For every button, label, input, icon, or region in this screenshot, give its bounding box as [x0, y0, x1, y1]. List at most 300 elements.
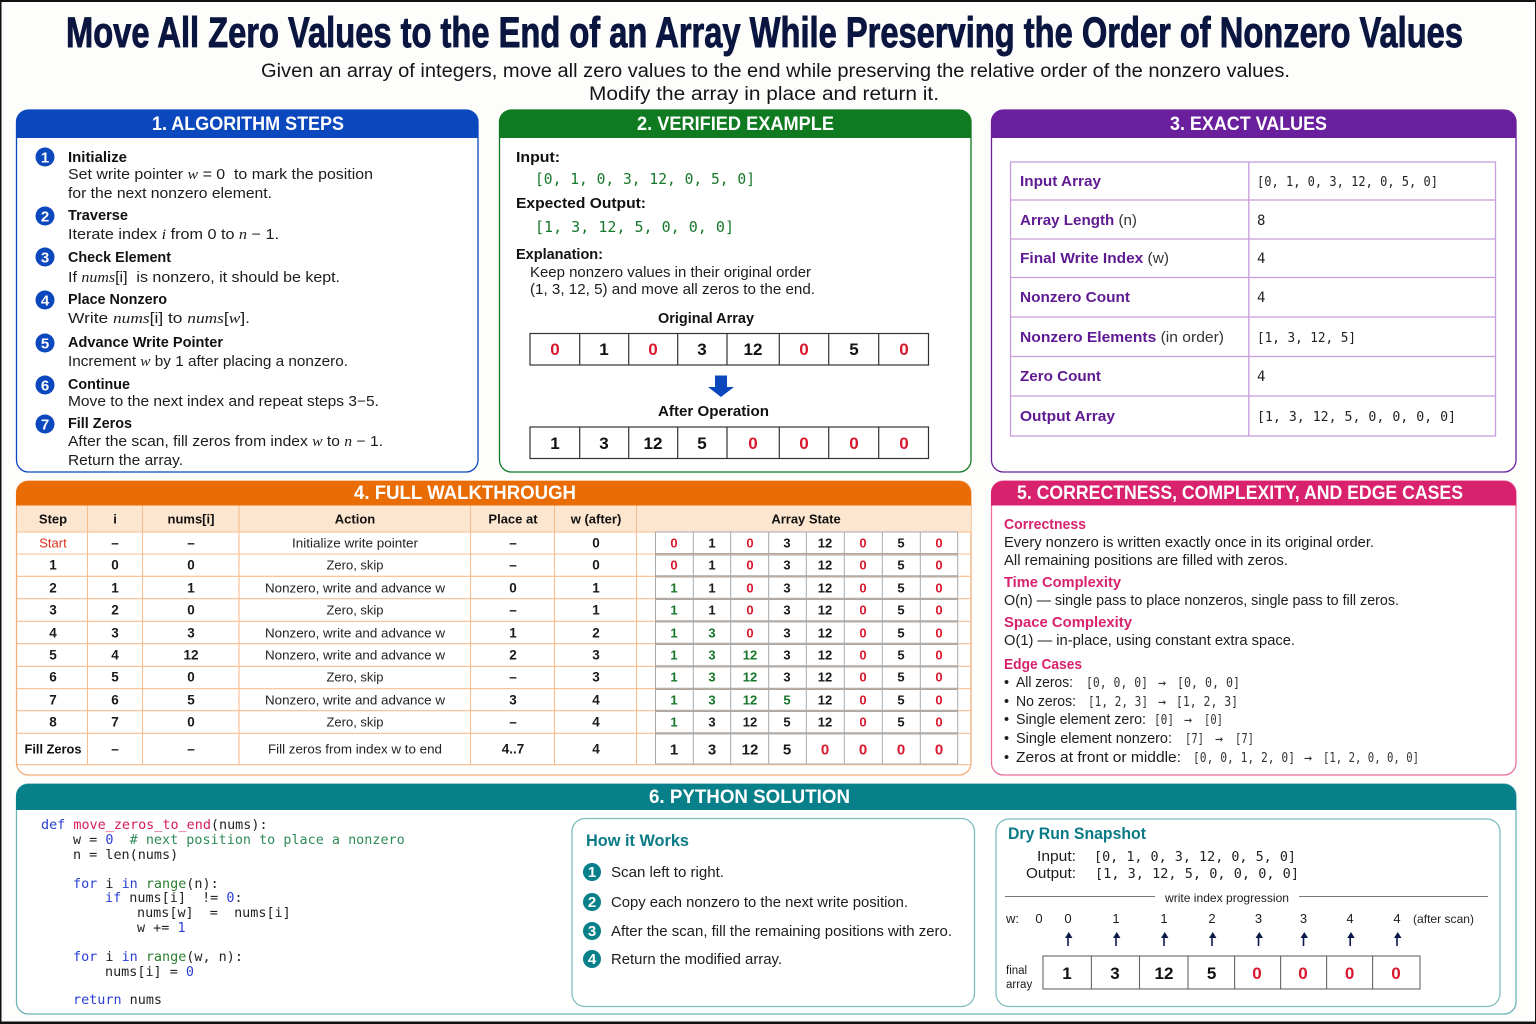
edge cases: → [1215, 731, 1223, 747]
row: fill zeros: 0 [821, 742, 829, 758]
row: step 1: 0 [592, 558, 600, 572]
row: step 8: 12 [743, 714, 757, 730]
correctness: Every nonzero is written exactly once in its original order. [1004, 535, 1374, 551]
original array: 3 [697, 340, 707, 359]
row: step 7: 5 [187, 692, 195, 708]
row: step 8: 1 [670, 714, 678, 730]
row: step 7: 5 [783, 692, 791, 708]
after operation array: 12 [644, 434, 662, 453]
row: step 8: 12 [818, 714, 832, 730]
row: fill zeros: – [187, 742, 195, 756]
dry run input output [1026, 849, 1299, 882]
header row: Place at [488, 512, 538, 526]
row: step 7: 3 [708, 692, 716, 708]
final array: array [1006, 979, 1032, 991]
how step 1: 1 [588, 864, 596, 881]
input: [0, 1, 0, 3, 12, 0, 5, 0] [535, 170, 755, 188]
row: step 5: 5 [897, 648, 905, 662]
write index row: 2 [1208, 911, 1216, 926]
header row: Array State [771, 512, 841, 526]
row: step 6: 0 [935, 670, 943, 684]
row: step 5: 5 [49, 648, 57, 662]
input [516, 150, 755, 188]
row: step 3: 0 [746, 602, 754, 618]
row: start: Initialize write pointer [292, 536, 419, 550]
correctness [1004, 516, 1374, 569]
step 5: 5 [41, 336, 49, 352]
step 7 [36, 414, 383, 469]
row: step 3: 1 [708, 602, 716, 618]
row: step 2: 0 [859, 580, 867, 596]
step 6: Continue [68, 377, 130, 393]
row: start: 3 [783, 536, 791, 550]
card: dry run snapshot: Dry Run Snapshot [1008, 825, 1146, 843]
arrow: down [708, 376, 734, 397]
edge cases: Edge Cases [1004, 656, 1082, 673]
row: fill zeros: Fill Zeros [24, 742, 82, 756]
row: fill zeros: 0 [859, 742, 867, 758]
expected output: [1, 3, 12, 5, 0, 0, 0] [535, 218, 734, 236]
write index row: 4 [1346, 911, 1354, 926]
step 3 [36, 248, 340, 286]
progress arrows [1065, 932, 1402, 946]
row: start: – [111, 536, 119, 550]
step 6: 6 [41, 378, 49, 394]
row: step 7: 4 [592, 692, 600, 708]
row: step 7: 5 [897, 692, 905, 708]
row: step 8: 3 [708, 714, 716, 730]
table: exact values: [1, 3, 12, 5] [1257, 330, 1356, 346]
step 7: 7 [41, 416, 49, 434]
row: step 8: 0 [935, 714, 943, 730]
row: step 4: 3 [187, 626, 195, 640]
row: step 5: 1 [670, 648, 678, 662]
table: exact values: Output Array [1020, 408, 1116, 425]
code block: w += 1 [137, 921, 186, 936]
dry run input output: Input: [1037, 849, 1076, 865]
how step 3: After the scan, fill the remaining positions with zero. [611, 924, 952, 940]
edge cases: [0, 0, 0] [1086, 675, 1148, 691]
edge cases: [7] [1235, 731, 1254, 747]
after operation array [530, 404, 928, 458]
final array: 0 [1252, 964, 1262, 983]
final array: 12 [1155, 964, 1173, 983]
header row: i [113, 512, 117, 526]
row: step 1: 12 [818, 558, 832, 572]
edge cases: All zeros: [1016, 675, 1073, 691]
row: step 4: 0 [935, 626, 943, 640]
edge cases: [1, 2, 0, 0, 0] [1323, 750, 1419, 766]
row: fill zeros: 3 [708, 742, 716, 758]
row: fill zeros: 0 [935, 742, 943, 758]
row: step 4 [49, 626, 943, 640]
edge cases: • [1004, 694, 1009, 710]
row: step 5 [49, 648, 943, 662]
step 4: Write nums [i] to nums [w]. [68, 311, 250, 327]
panel: python solution [16, 784, 1516, 1014]
step 5: Increment w by 1 after placing a nonzero. [68, 354, 348, 370]
step 4: Place Nonzero [68, 292, 167, 308]
panel: exact values [991, 110, 1516, 472]
row: step 7: 0 [935, 692, 943, 708]
edge cases: Single element zero: [1016, 712, 1146, 728]
row: step 5: 12 [183, 648, 199, 662]
row: step 1: 0 [746, 558, 754, 572]
row: step 6: 3 [783, 670, 791, 684]
how step 4: Return the modified array. [611, 952, 782, 968]
header row: nums[i] [168, 512, 214, 526]
code block: if nums[i] != 0: [105, 891, 243, 906]
after operation array: 0 [849, 434, 859, 453]
row: step 8: 7 [111, 714, 119, 730]
row: step 5: 2 [509, 648, 517, 662]
table: exact values: 8 [1257, 213, 1265, 229]
final array: 0 [1345, 964, 1354, 983]
header row: w (after) [570, 512, 621, 526]
write index row: 1 [1112, 911, 1120, 926]
header row [39, 512, 841, 526]
row: step 4: 4 [49, 626, 57, 640]
original array: 0 [899, 340, 909, 359]
final array: final [1006, 965, 1027, 977]
row: step 7: 0 [859, 692, 867, 708]
how step 1 [583, 863, 724, 881]
row: step 2: 1 [592, 580, 600, 596]
row: step 4: 1 [670, 626, 678, 640]
card: dry run snapshot [996, 819, 1500, 1006]
final array: 0 [1298, 964, 1308, 983]
row: step 2: 1 [187, 580, 195, 596]
row: start: 12 [818, 536, 832, 550]
row: step 3: 3 [783, 602, 791, 618]
expected output [516, 196, 734, 236]
subtitle: Given an array of integers, move all zero values to the end while preserving the relative order of the nonzero values. [261, 61, 1290, 82]
row: step 3: 0 [187, 602, 195, 618]
row: fill zeros: 1 [670, 742, 678, 758]
edge cases: • [1004, 712, 1009, 728]
row: step 7: 6 [111, 692, 119, 708]
step 3: 3 [41, 250, 49, 266]
edge cases: [1, 2, 3] [1176, 694, 1238, 710]
table: exact values: Input Array [1020, 173, 1102, 190]
row: step 1: Zero, skip [326, 558, 384, 572]
row: start: – [187, 536, 195, 550]
write index row: 3 [1255, 911, 1262, 926]
edge cases: [0] [1154, 712, 1174, 728]
explanation [516, 247, 815, 298]
dry run input output: [1, 3, 12, 5, 0, 0, 0, 0] [1095, 866, 1299, 882]
row: step 2: 0 [935, 580, 943, 596]
write index row: w: [1005, 911, 1019, 926]
row: step 4: 3 [783, 626, 791, 640]
row: step 2: Nonzero, write and advance w [265, 580, 446, 596]
how step 3: 3 [588, 923, 596, 940]
final array [1006, 956, 1420, 991]
header row: Step [39, 512, 67, 526]
explanation: Keep nonzero values in their original order [530, 265, 811, 281]
table: exact values: Final Write Index (w) [1020, 250, 1169, 267]
final array: 3 [1110, 964, 1120, 983]
row: step 6: – [509, 670, 517, 684]
row: step 6: Zero, skip [326, 670, 384, 684]
row: step 7: 3 [509, 692, 517, 708]
subtitle: Modify the array in place and return it. [589, 84, 939, 105]
code block: nums[w] = nums[i] [137, 906, 291, 921]
step 2 [36, 206, 279, 243]
heading: correctness: 5. CORRECTNESS, COMPLEXITY, AND EDGE CASES [1017, 483, 1463, 504]
card: how it works [572, 818, 974, 1006]
row: step 2: 12 [818, 580, 832, 596]
row: fill zeros: 12 [742, 742, 758, 758]
edge cases: → [1184, 712, 1192, 728]
row: step 8: 8 [49, 714, 57, 730]
step 4 [36, 290, 250, 327]
row: step 8: 4 [592, 714, 600, 730]
original array: Original Array [658, 311, 754, 327]
correctness: All remaining positions are filled with zeros. [1004, 553, 1288, 569]
row: step 1: – [509, 558, 517, 572]
step 1: Initialize [68, 150, 127, 166]
edge cases: → [1158, 694, 1166, 710]
write index label: write index progression [1164, 891, 1289, 905]
panel: algorithm steps [16, 110, 478, 472]
row: step 4: 3 [111, 626, 119, 640]
space complexity: Space Complexity [1004, 614, 1133, 631]
row: step 1: 5 [897, 558, 905, 572]
row: step 1: 0 [187, 558, 195, 572]
write index row: (after scan) [1413, 912, 1474, 926]
row: step 5: 0 [859, 648, 867, 662]
row: step 2: 3 [783, 580, 791, 596]
table: exact values: Nonzero Elements (in order) [1020, 329, 1224, 346]
code block: def move_zeros_to_end(nums): [41, 818, 268, 833]
heading: python solution: 6. PYTHON SOLUTION [649, 787, 850, 808]
edge cases: [7] [1185, 731, 1204, 747]
row: step 7 [49, 692, 943, 708]
step 2: 2 [41, 208, 49, 226]
row: step 6: 6 [49, 670, 57, 684]
original array: 0 [648, 340, 658, 359]
step 3: Check Element [68, 250, 171, 266]
write index row: 0 [1064, 911, 1072, 926]
row: step 2: 1 [111, 580, 119, 596]
heading: verified example: 2. VERIFIED EXAMPLE [637, 114, 834, 135]
table: exact values: 4 [1257, 251, 1265, 267]
row: step 3: 0 [935, 602, 943, 618]
array state grid [656, 532, 958, 764]
row: step 6: 0 [187, 670, 195, 684]
code block: w = 0 # next position to place a nonzero [73, 833, 405, 848]
table: exact values: Nonzero Count [1020, 289, 1130, 306]
step 4: 4 [41, 292, 50, 310]
row: step 4: 3 [708, 626, 716, 640]
row: fill zeros: 4..7 [502, 742, 524, 756]
how step 1: Scan left to right. [611, 865, 724, 881]
row: step 3: 1 [670, 602, 678, 618]
code block: return nums [73, 993, 162, 1008]
header row: Action [335, 512, 375, 526]
row: step 8: 0 [187, 714, 195, 730]
row: step 6 [49, 670, 943, 684]
table: walkthrough [17, 506, 971, 765]
row: step 6: 3 [592, 670, 600, 684]
write index row: 4 [1393, 911, 1401, 926]
row: step 3: 12 [818, 602, 832, 618]
row: step 3 [49, 602, 943, 618]
row: step 5: 3 [783, 648, 791, 662]
step 1: 1 [41, 150, 49, 166]
step 6 [36, 376, 379, 410]
row: step 4: Nonzero, write and advance w [265, 626, 446, 640]
time complexity [1004, 574, 1399, 609]
row: step 3: 1 [592, 602, 600, 618]
row: step 3: 5 [897, 602, 905, 618]
edge cases [1004, 656, 1419, 766]
original array [530, 311, 928, 365]
how step 2: Copy each nonzero to the next write position. [611, 895, 908, 911]
explanation: (1, 3, 12, 5) and move all zeros to the end. [530, 282, 815, 298]
row: step 2: 1 [670, 580, 678, 596]
row: step 3: 0 [859, 602, 867, 618]
row: step 5: Nonzero, write and advance w [265, 648, 446, 662]
step 7: Fill Zeros [68, 416, 132, 432]
row: step 7: Nonzero, write and advance w [265, 692, 446, 708]
original array: 12 [744, 340, 762, 359]
step 1 [36, 148, 373, 202]
row: step 4: 5 [897, 626, 905, 640]
row: start: – [509, 536, 517, 550]
row: step 1 [49, 558, 943, 572]
after operation array: 5 [697, 434, 707, 453]
heading: algorithm steps: 1. ALGORITHM STEPS [152, 114, 344, 135]
row: step 8: 5 [783, 714, 791, 730]
code block: n = len(nums) [73, 848, 178, 863]
edge cases: [0, 0, 0] [1177, 675, 1240, 691]
row: step 8: 5 [897, 714, 905, 730]
expected output: Expected Output: [516, 196, 646, 212]
row: step 6: 5 [897, 670, 905, 684]
edge cases: No zeros: [1016, 694, 1076, 710]
row: step 7: 7 [49, 692, 57, 708]
row: step 2: 0 [509, 580, 517, 596]
original array: 5 [849, 340, 859, 359]
row: step 5: 12 [818, 648, 832, 662]
step 1: for the next nonzero element. [68, 186, 272, 202]
row: step 5: 12 [743, 648, 757, 662]
row: step 6: 1 [670, 670, 678, 684]
edge cases: [1, 2, 3] [1088, 694, 1148, 710]
step 5 [36, 334, 348, 370]
edge cases: [0, 0, 1, 2, 0] [1193, 750, 1295, 766]
row: start: Start [39, 536, 67, 550]
row: step 6: 5 [111, 670, 119, 684]
edge cases: • [1004, 731, 1009, 747]
row: start: 0 [935, 536, 943, 550]
edge cases: Zeros at front or middle: [1016, 750, 1181, 766]
row: step 3: 2 [111, 602, 119, 618]
row: start: 0 [859, 536, 867, 550]
row: fill zeros: Fill zeros from index w to end [268, 742, 442, 756]
row: step 4: 0 [746, 626, 754, 640]
panel: correctness, complexity, edge cases [991, 481, 1516, 775]
row: step 1: 3 [783, 558, 791, 572]
step 2: Traverse [68, 208, 128, 224]
edge cases: Single element nonzero: [1016, 731, 1172, 747]
space complexity [1004, 614, 1295, 649]
row: step 8: Zero, skip [326, 714, 384, 730]
edge cases: [0] [1204, 712, 1223, 728]
after operation array: After Operation [658, 404, 769, 420]
row: step 7: 12 [818, 692, 832, 708]
code block [41, 818, 405, 1008]
row: step 8: 0 [859, 714, 867, 730]
row: start: 0 [746, 536, 754, 550]
row: fill zeros [24, 742, 943, 758]
row: step 2: 5 [897, 580, 905, 596]
row: step 2: 0 [746, 580, 754, 596]
edge cases: • [1004, 750, 1009, 766]
table: exact values [1010, 162, 1496, 436]
original array: 1 [599, 340, 609, 359]
row: step 1: 0 [935, 558, 943, 572]
correctness: Correctness [1004, 516, 1086, 533]
row: step 3: 3 [49, 602, 57, 618]
row: fill zeros: – [111, 742, 119, 756]
row: step 2 [49, 580, 943, 596]
panel: verified example [499, 110, 971, 472]
row: step 1: 1 [708, 558, 716, 572]
code block: for i in range(w, n): [73, 950, 243, 965]
row: step 4: 12 [818, 626, 832, 640]
row: step 6: 12 [743, 670, 757, 684]
how step 4: 4 [588, 951, 597, 968]
row: step 3: Zero, skip [326, 602, 384, 618]
edge cases: → [1158, 675, 1166, 691]
table: exact values: [0, 1, 0, 3, 12, 0, 5, 0] [1257, 174, 1438, 190]
after operation array: 0 [799, 434, 809, 453]
after operation array: 0 [748, 434, 758, 453]
table: exact values: Array Length (n) [1020, 212, 1137, 229]
code block: nums[i] = 0 [105, 965, 194, 980]
step 7: Return the array. [68, 453, 183, 469]
row: step 2: 2 [49, 580, 57, 596]
step 3: If nums[i] is nonzero, it should be kept. [68, 270, 340, 286]
row: start [39, 536, 943, 550]
row: step 4: 0 [859, 626, 867, 640]
original array: 0 [799, 340, 809, 359]
row: fill zeros: 0 [897, 742, 905, 758]
time complexity: O(n) — single pass to place nonzeros, single pass to fill zeros. [1004, 593, 1399, 609]
final array: 1 [1062, 964, 1072, 983]
dry run input output: Output: [1026, 866, 1076, 882]
row: step 6: 12 [818, 670, 832, 684]
after operation array: 1 [550, 434, 560, 453]
code block: for i in range(n): [73, 877, 219, 892]
time complexity: Time Complexity [1004, 574, 1122, 591]
space complexity: O(1) — in-place, using constant extra space. [1004, 633, 1295, 649]
step 7: After the scan, fill zeros from index w to n − 1. [68, 434, 383, 450]
subtitle [261, 61, 1290, 105]
edge cases: → [1304, 750, 1312, 766]
row: step 4: 1 [509, 626, 517, 640]
row: step 3: – [509, 602, 517, 618]
row: step 1: 1 [49, 558, 57, 572]
row: start: 5 [897, 536, 905, 550]
row: start: 0 [592, 536, 600, 550]
step 6: Move to the next index and repeat steps 3−5. [68, 394, 379, 410]
row: step 5: 0 [935, 648, 943, 662]
row: step 4: 2 [592, 626, 600, 640]
